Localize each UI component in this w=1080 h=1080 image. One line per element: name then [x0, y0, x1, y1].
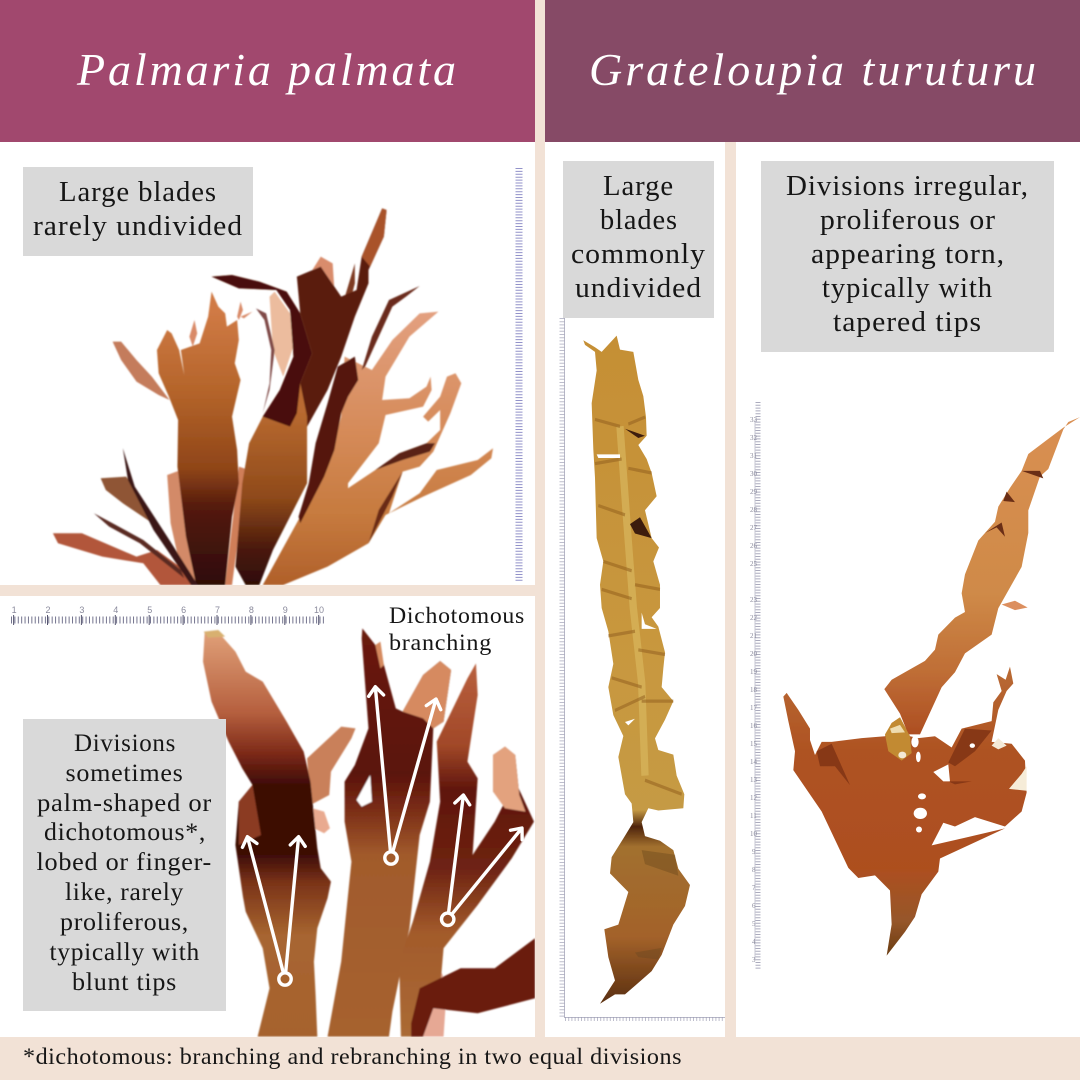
scale ruler: horizontal 1 to 10: 8 [249, 605, 254, 615]
scale ruler: vertical with numbers: 9 [752, 848, 756, 856]
callout: divisions description [23, 719, 226, 1011]
callout: divisions description: typically with [50, 937, 200, 966]
callout: divisions description: sometimes [66, 758, 184, 787]
callout: large blades rarely undivided [23, 167, 253, 256]
scale ruler: horizontal 1 to 10: 7 [215, 605, 220, 615]
scale ruler: horizontal 1 to 10: 6 [181, 605, 186, 615]
photo: Grateloupia torn blade [783, 417, 1080, 956]
callout: divisions description: lobed or finger- [36, 847, 212, 876]
scale ruler: horizontal 1 to 10: 4 [113, 605, 118, 615]
footnote: dichotomous definition: *dichotomous: branching and rebranching in two equal divisions [23, 1044, 682, 1069]
scale ruler: vertical with numbers: 23 [750, 596, 758, 604]
callout: divisions irregular: tapered tips [833, 307, 982, 338]
scale ruler: vertical with numbers: 6 [752, 902, 756, 910]
scale ruler: vertical with numbers: 31 [750, 452, 758, 460]
scale ruler: vertical with numbers: 17 [750, 704, 758, 712]
callout: divisions description: Divisions [74, 728, 176, 757]
callout: large blades commonly undivided: blades [600, 205, 678, 236]
callout: divisions irregular: proliferous or [820, 205, 996, 236]
scale ruler: horizontal 1 to 10: 3 [79, 605, 84, 615]
callout: large blades commonly undivided [563, 161, 714, 318]
scale ruler: vertical with numbers: 28 [750, 506, 758, 514]
scale ruler: vertical with numbers: 26 [750, 542, 758, 550]
label: dichotomous branching [389, 603, 525, 656]
callout: large blades rarely undivided: rarely undivided [33, 211, 243, 242]
callout: large blades commonly undivided: undivided [575, 273, 702, 304]
callout: divisions description: like, rarely [65, 877, 184, 906]
scale ruler: horizontal 1 to 10: 2 [46, 605, 51, 615]
arrows: dichotomous branching markers [247, 687, 522, 985]
scale ruler: vertical with numbers: 12 [750, 794, 758, 802]
scale ruler: vertical with numbers: 29 [750, 488, 758, 496]
scale ruler: vertical with numbers: 15 [750, 740, 758, 748]
scale ruler: vertical with numbers: 10 [750, 830, 758, 838]
scale ruler: vertical with numbers: 16 [750, 722, 758, 730]
scale ruler: Palmaria whole [516, 168, 522, 582]
callout: divisions irregular: appearing torn, [811, 239, 1005, 270]
scale ruler: vertical with numbers: 5 [752, 920, 756, 928]
scale ruler: horizontal 1 to 10 [11, 605, 326, 625]
callout: large blades commonly undivided: commonly [571, 239, 706, 270]
scale ruler: vertical with numbers: 3 [752, 956, 756, 964]
label: dichotomous branching: Dichotomous [389, 603, 525, 629]
callout: divisions irregular: typically with [822, 273, 993, 304]
scale ruler: vertical with numbers: 11 [750, 812, 757, 820]
scale ruler: vertical with numbers: 22 [750, 614, 758, 622]
heading: Palmaria palmata [0, 0, 535, 142]
arrow pair: middle blade [375, 687, 436, 864]
scale ruler: vertical with numbers: 27 [750, 524, 758, 532]
heading: Grateloupia turuturu: Grateloupia turuturu [589, 44, 1038, 95]
scale ruler: vertical with numbers: 14 [750, 758, 758, 766]
scale ruler: horizontal 1 to 10: 5 [147, 605, 152, 615]
scale ruler: vertical with numbers: 13 [750, 776, 758, 784]
callout: divisions description: blunt tips [72, 967, 177, 996]
photo: Grateloupia long blade [583, 336, 690, 1004]
scale ruler: vertical with numbers: 30 [750, 470, 758, 478]
scale ruler: horizontal 1 to 10: 1 [12, 605, 17, 615]
scale ruler: vertical with numbers: 8 [752, 866, 756, 874]
scale ruler: vertical with numbers: 21 [750, 632, 758, 640]
callout: divisions description: proliferous, [60, 907, 189, 936]
scale ruler: vertical with numbers [750, 402, 758, 970]
heading: Palmaria palmata: Palmaria palmata [76, 44, 458, 95]
photo: Palmaria close-up [203, 607, 535, 1037]
label: dichotomous branching: branching [389, 630, 492, 656]
scale ruler: vertical with numbers: 32 [750, 434, 758, 442]
scale rulers: L-shaped [562, 318, 725, 1019]
panel: Grateloupia undivided blade [545, 142, 725, 1037]
scale ruler: vertical with numbers: 18 [750, 686, 758, 694]
panel: Palmaria close-up of divisions [0, 596, 535, 1037]
scale ruler: vertical with numbers: 33 [750, 416, 758, 424]
scale ruler: vertical with numbers: 25 [750, 560, 758, 568]
callout: divisions description: dichotomous*, [44, 817, 206, 846]
arrow pair: right blade [442, 795, 522, 926]
photo: Palmaria whole specimen [53, 208, 493, 585]
callout: divisions description: palm-shaped or [37, 788, 212, 817]
scale ruler: horizontal 1 to 10: 9 [283, 605, 288, 615]
callout: divisions irregular [761, 161, 1054, 352]
callout: large blades commonly undivided: Large [603, 171, 674, 202]
panel: Palmaria whole specimen [0, 142, 535, 585]
panel: Grateloupia divided blade [736, 142, 1080, 1037]
callout: divisions irregular: Divisions irregular, [786, 171, 1029, 202]
scale ruler: vertical with numbers: 4 [752, 938, 756, 946]
callout: large blades rarely undivided: Large blades [59, 177, 217, 208]
scale ruler: horizontal 1 to 10: 10 [314, 605, 324, 615]
arrow pair: left blade [247, 837, 299, 985]
scale ruler: vertical with numbers: 19 [750, 668, 758, 676]
scale ruler: vertical with numbers: 7 [752, 884, 756, 892]
heading: Grateloupia turuturu [545, 0, 1080, 142]
scale ruler: vertical with numbers: 20 [750, 650, 758, 658]
